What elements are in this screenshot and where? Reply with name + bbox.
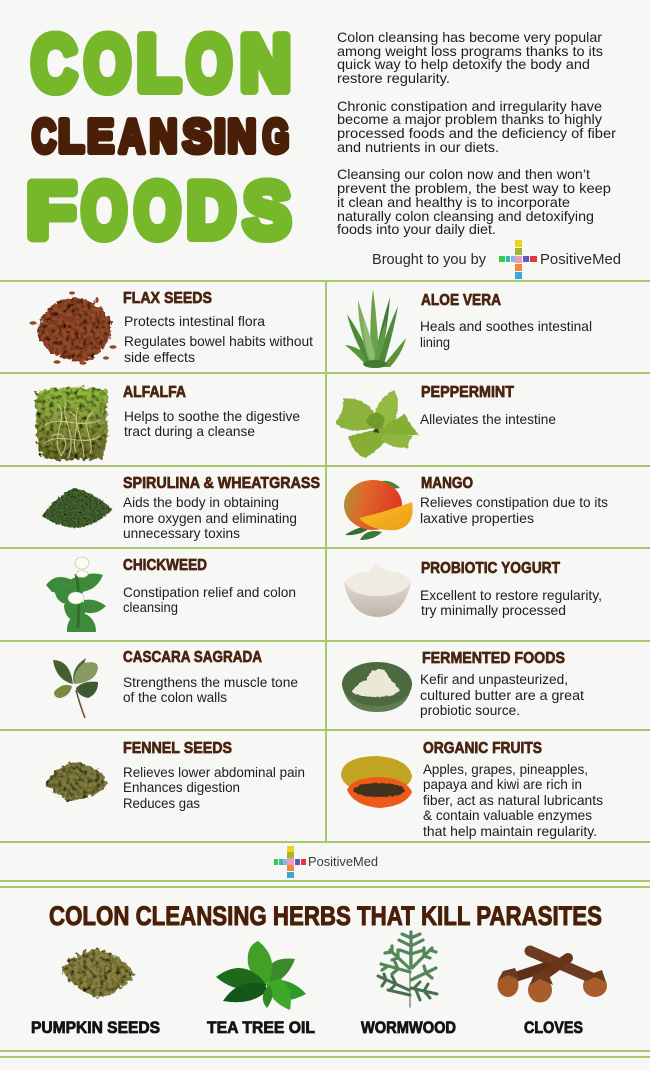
text: cascara sagrada: Strengthens the muscle tone (123, 674, 298, 690)
title: E (87, 110, 114, 162)
panel: spirulina and wheatgrass (42, 475, 320, 541)
intro text (337, 29, 616, 237)
title: C (32, 19, 77, 107)
logo: PositiveMed top: PositiveMed (540, 251, 621, 268)
text: fennel seeds (123, 764, 305, 811)
title: A (119, 110, 145, 162)
logo: PositiveMed top (499, 240, 621, 279)
text: organic fruits: fiber, act as natural lubricants (423, 792, 603, 808)
herb: pumpkin seeds (31, 949, 160, 1037)
icon: flax seeds (30, 291, 116, 365)
text: flax seeds: Regulates bowel habits without (124, 333, 313, 349)
title (27, 19, 291, 254)
title: O (82, 166, 127, 254)
title: C (32, 110, 56, 162)
text: peppermint: Alleviates the intestine (420, 411, 556, 427)
icon: pumpkin seeds (62, 949, 135, 998)
text: fennel seeds: Enhances digestion (123, 779, 240, 795)
intro text: prevent the problem, the best way to keep (337, 180, 611, 196)
icon: aloe vera plant (345, 289, 406, 368)
text: spirulina and wheatgrass: Aids the body in obtaining (123, 494, 279, 510)
logo: PositiveMed bottom (274, 846, 378, 878)
title: O (134, 166, 180, 254)
panel: probiotic yogurt (344, 560, 602, 618)
intro text: and nutrients in our diets. (337, 139, 499, 155)
label: cloves: CLOVES (524, 1019, 583, 1037)
text: cascara sagrada (123, 674, 298, 705)
panel: cascara sagrada (53, 649, 298, 718)
title: D (187, 166, 236, 254)
icon: fennel seeds (46, 762, 108, 801)
icon: tea tree leaves (216, 941, 306, 1010)
intro text: quick way to help detoxify the body and (337, 56, 590, 72)
title: N (150, 110, 177, 162)
icon: chickweed plant (46, 557, 106, 632)
heading: aloe vera: ALOE VERA (421, 292, 501, 309)
heading: cascara sagrada: CASCARA SAGRADA (123, 649, 262, 666)
panel: organic fruits (341, 740, 603, 839)
title: F (27, 166, 76, 254)
text: flax seeds: side effects (124, 349, 195, 365)
text: mango: laxative properties (420, 510, 534, 526)
panel: chickweed (46, 557, 296, 632)
text: chickweed (123, 584, 296, 615)
icon: mango (344, 480, 413, 540)
intro text: naturally colon cleansing and detoxifying (337, 208, 594, 224)
text: alfalfa (124, 408, 300, 439)
text: spirulina and wheatgrass (123, 494, 297, 541)
text: fermented foods: probiotic source. (420, 702, 520, 718)
panel: flax seeds (30, 290, 313, 365)
title: I (214, 110, 226, 162)
panel: peppermint (335, 384, 556, 458)
heading: mango: MANGO (421, 475, 473, 492)
text: probiotic yogurt: try minimally processed (421, 602, 566, 618)
panel: mango (344, 475, 608, 540)
heading: peppermint: PEPPERMINT (421, 384, 514, 401)
icon: bowl of fermented food (342, 662, 412, 712)
intro text: among weight loss programs thanks to its (337, 43, 603, 59)
table grid lines (0, 281, 650, 1057)
text: fermented foods (420, 671, 584, 718)
icon: peppermint leaves (335, 390, 419, 458)
herb: wormwood (361, 932, 456, 1037)
label: pumpkin seeds: PUMPKIN SEEDS (31, 1019, 160, 1037)
heading: fennel seeds: FENNEL SEEDS (123, 740, 232, 757)
title: L (137, 19, 180, 107)
herb: tea tree oil (207, 941, 315, 1037)
heading: spirulina and wheatgrass: SPIRULINA & WHEATGRASS (123, 475, 320, 492)
text: spirulina and wheatgrass: more oxygen and eliminating (123, 510, 297, 526)
text: cascara sagrada: of the colon walls (123, 689, 227, 705)
label: tea tree oil: TEA TREE OIL (207, 1019, 315, 1037)
icon: bowl of yogurt (344, 563, 411, 617)
intro text: Chronic constipation and irregularity have (337, 98, 602, 114)
text: organic fruits (423, 761, 603, 839)
title: S (183, 110, 211, 162)
text: organic fruits: that help maintain regularity. (423, 823, 597, 839)
heading: probiotic yogurt: PROBIOTIC YOGURT (421, 560, 560, 577)
intro text: Cleansing our colon now and then won’t (337, 166, 590, 182)
intro text: become a major problem thanks to highly (337, 111, 602, 127)
text: aloe vera (420, 318, 592, 350)
panel: alfalfa (35, 384, 300, 460)
intro text: restore regularity. (337, 70, 450, 86)
text: mango: Relieves constipation due to its (420, 494, 608, 510)
panel: fennel seeds (46, 740, 305, 811)
text: organic fruits: & contain valuable enzymes (423, 807, 592, 823)
icon: papaya (341, 756, 412, 808)
text: flax seeds: Protects intestinal flora (124, 313, 265, 329)
text: flax seeds (124, 313, 313, 365)
section: herbs that kill parasites (31, 901, 607, 1037)
text: spirulina and wheatgrass: unnecessary toxins (123, 525, 240, 541)
icon: cascara leaves (53, 658, 98, 718)
title: G (263, 110, 289, 162)
text: fennel seeds: Reduces gas (123, 795, 200, 811)
text: chickweed: Constipation relief and colon (123, 584, 296, 600)
heading: alfalfa: ALFALFA (123, 384, 186, 401)
intro text: it clean and healthy is to incorporate (337, 194, 570, 210)
title: L (58, 110, 84, 162)
icon: spirulina powder (42, 488, 112, 528)
title: O (187, 19, 232, 107)
logo: PositiveMed bottom: PositiveMed (308, 854, 378, 869)
title: N (228, 110, 256, 162)
icon: wormwood plant (378, 932, 437, 1007)
text: alfalfa: tract during a cleanse (124, 423, 255, 439)
text: fermented foods: cultured butter are a great (420, 687, 584, 703)
panel: aloe vera (345, 289, 592, 368)
heading: organic fruits: ORGANIC FRUITS (423, 740, 542, 757)
text: organic fruits: papaya and kiwi are rich in (423, 776, 582, 792)
text: fennel seeds: Relieves lower abdominal pain (123, 764, 305, 780)
text: probiotic yogurt (420, 587, 602, 618)
intro text: foods into your daily diet. (337, 221, 496, 237)
label: wormwood: WORMWOOD (361, 1019, 456, 1037)
intro text: Colon cleansing has become very popular (337, 29, 602, 45)
text: fermented foods: Kefir and unpasteurized, (420, 671, 568, 687)
text: aloe vera: Heals and soothes intestinal (420, 318, 592, 334)
icon: cloves (498, 951, 607, 1002)
title: S (244, 166, 290, 254)
herb: cloves (498, 951, 607, 1037)
title: O (84, 19, 130, 107)
credit line: Brought to you by (372, 252, 487, 268)
heading: chickweed: CHICKWEED (123, 557, 207, 574)
text: aloe vera: lining (420, 334, 450, 350)
icon: alfalfa sprouts (35, 387, 108, 460)
heading: flax seeds: FLAX SEEDS (123, 290, 212, 307)
intro text: processed foods and the deficiency of fiber (337, 125, 616, 141)
heading: fermented foods: FERMENTED FOODS (422, 650, 565, 667)
panel: fermented foods (342, 650, 584, 718)
text: probiotic yogurt: Excellent to restore regularity, (420, 587, 602, 603)
text: organic fruits: Apples, grapes, pineapples, (423, 761, 588, 777)
text: mango (420, 494, 608, 526)
text: alfalfa: Helps to soothe the digestive (124, 408, 300, 424)
title: N (240, 19, 291, 107)
text: chickweed: cleansing (123, 599, 178, 615)
